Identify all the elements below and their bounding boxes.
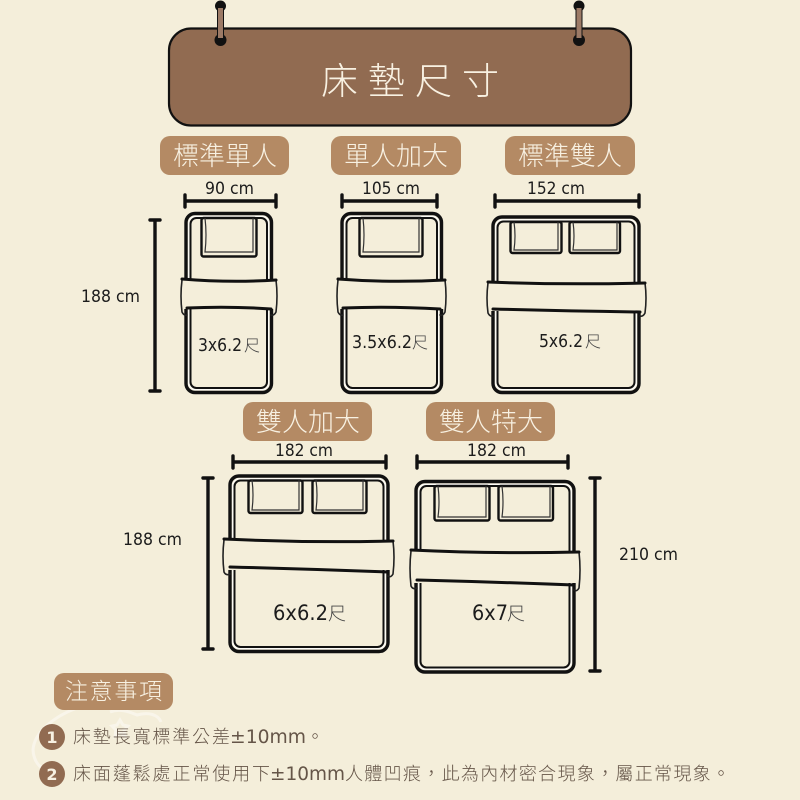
dimension: 152 cm: 152 cm — [527, 179, 585, 199]
size text: 尺 — [585, 328, 601, 352]
label: king: 雙人特大 — [439, 402, 543, 439]
dimension: 182 cm right — [417, 441, 568, 468]
dimension: 90 cm: 90 cm — [205, 179, 254, 199]
pillow right — [312, 480, 366, 513]
note 1: 床墊長寬標準公差 — [73, 723, 230, 749]
watermark bear outline — [33, 708, 161, 772]
pillow left — [434, 486, 490, 520]
dimension: 188 cm lower: 188 cm — [123, 530, 182, 550]
dimension: 188 cm lower — [123, 478, 213, 649]
size text: 5x6.2 — [539, 331, 583, 352]
size text: 尺 — [328, 600, 346, 626]
dimension: 105 cm — [342, 179, 437, 207]
dimension: 210 cm — [590, 478, 678, 671]
bed: standard single — [181, 214, 277, 392]
dimension: 152 cm — [495, 179, 639, 207]
badge 2 — [39, 761, 65, 787]
size text: 尺 — [244, 332, 260, 356]
pillow — [202, 218, 256, 256]
badge 1: 1 — [46, 728, 58, 747]
pillow left — [510, 222, 562, 253]
dimension: 182 cm left: 182 cm — [275, 441, 333, 461]
notes heading: 注意事項 — [65, 672, 162, 706]
bed: queen — [223, 476, 394, 652]
size text: 尺 — [412, 329, 428, 353]
note 2 — [39, 760, 730, 787]
size text: 尺 — [507, 600, 525, 626]
size text: 6x7 — [472, 601, 508, 625]
size text: 6x6.2 — [273, 601, 328, 625]
label: single plus: 單人加大 — [344, 136, 448, 173]
size text: 3x6.2 — [198, 335, 242, 356]
size text: 3.5x6.2 — [352, 332, 412, 353]
bed: single plus — [337, 214, 446, 392]
label: standard single: 標準單人 — [173, 136, 277, 173]
note 1: 。 — [306, 723, 324, 749]
pillow right — [498, 486, 553, 520]
quilt — [410, 550, 580, 591]
note 2: 床面蓬鬆處正常使用下 — [73, 760, 270, 786]
quilt — [223, 539, 394, 577]
size text — [472, 600, 525, 626]
badge 1 — [39, 724, 65, 750]
label: standard double: 標準雙人 — [518, 136, 622, 173]
label: queen: 雙人加大 — [256, 402, 360, 439]
dimension: 188 cm upper — [81, 220, 160, 391]
dimension: 210 cm: 210 cm — [619, 545, 678, 565]
quilt — [487, 282, 646, 316]
pillow left — [248, 480, 302, 513]
bed: king — [410, 482, 580, 672]
quilt — [181, 279, 277, 315]
sign board — [169, 0, 631, 126]
dimension: 182 cm right: 182 cm — [467, 441, 526, 461]
dimension: 90 cm — [185, 179, 276, 207]
dimension: 105 cm: 105 cm — [362, 179, 420, 199]
right hanging peg — [573, 0, 585, 46]
pillow — [360, 218, 422, 256]
pillow right — [570, 222, 620, 253]
note 2: 人體凹痕，此為內材密合現象，屬正常現象。 — [345, 760, 730, 786]
dimension: 182 cm left — [233, 441, 386, 468]
left hanging peg — [214, 0, 226, 46]
note 1: ±10mm — [230, 726, 306, 748]
badge 2: 2 — [46, 765, 58, 784]
title: 床墊尺寸 — [321, 61, 499, 102]
note 1 — [39, 723, 324, 750]
quilt — [337, 279, 446, 315]
bed: standard double — [487, 217, 646, 392]
dimension: 188 cm upper: 188 cm — [81, 287, 140, 307]
note 2: ±10mm — [270, 763, 345, 785]
